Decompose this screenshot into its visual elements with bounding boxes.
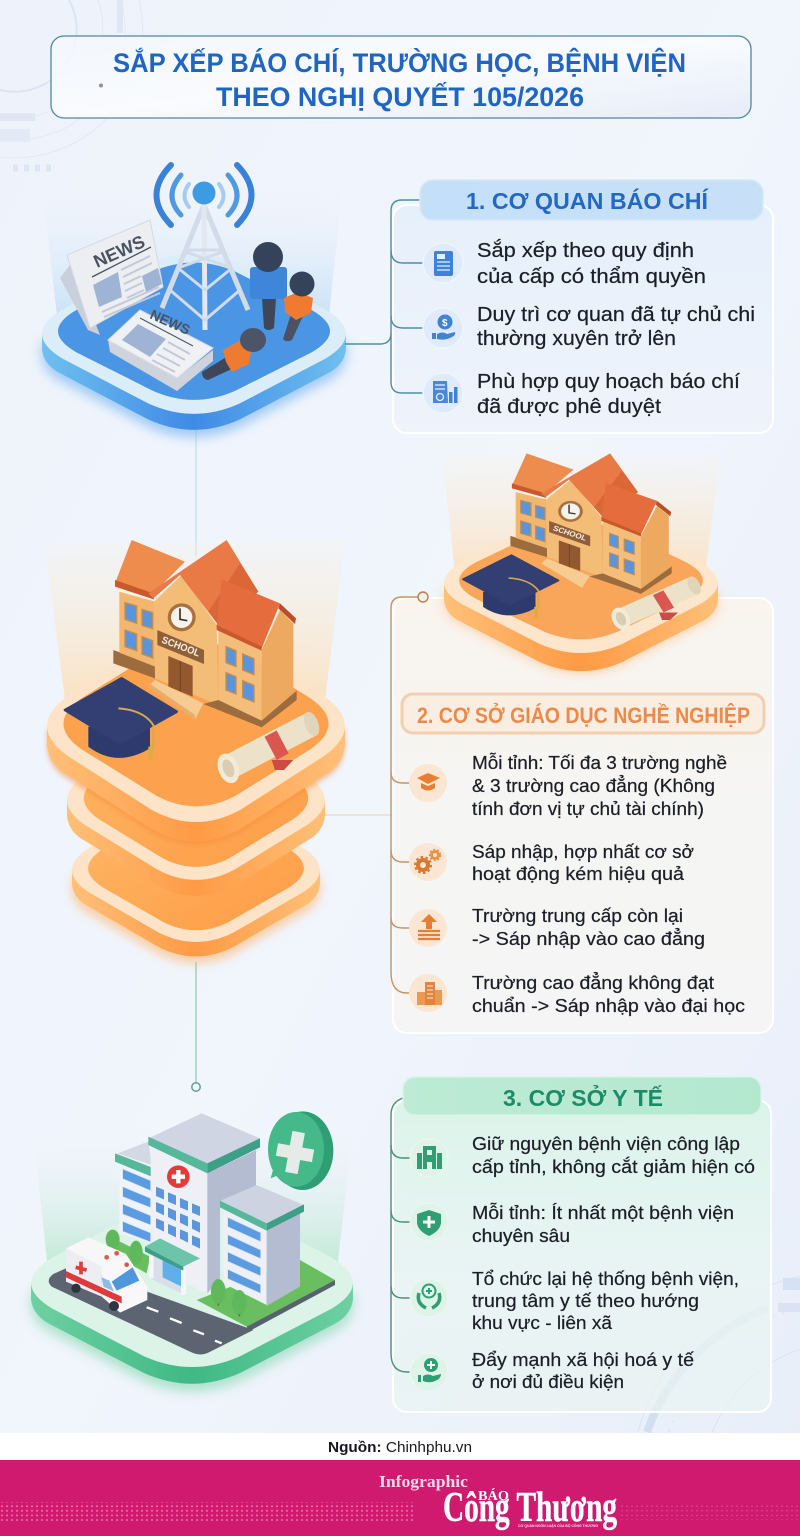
platform layer 2 bbox=[67, 720, 325, 896]
item: merge inefficient bbox=[409, 841, 694, 884]
platform layer 3 bbox=[72, 798, 320, 963]
item: maintain self-funded bbox=[423, 303, 755, 350]
item: provincial limit: Mỗi tỉnh: Tối đa 3 trường nghề bbox=[472, 752, 727, 773]
right block bbox=[223, 1210, 267, 1305]
microphone orange bbox=[283, 272, 314, 341]
connector tree 2 bbox=[391, 592, 428, 993]
road markings bbox=[147, 1307, 222, 1343]
heading 3: 3. CƠ SỞ Y TẾ bbox=[503, 1083, 663, 1111]
small diploma bbox=[608, 575, 704, 632]
item: socialisation bbox=[410, 1349, 695, 1392]
heading 3 bbox=[403, 1077, 761, 1115]
entrance bbox=[150, 1252, 185, 1295]
logo bbox=[379, 1472, 617, 1531]
item: substandard colleges: Trường cao đẳng không đạt bbox=[472, 972, 714, 993]
connector: school to hospital with ring bbox=[192, 962, 200, 1091]
item: press planning: đã được phê duyệt bbox=[477, 395, 661, 418]
platform layer 1 bbox=[47, 630, 345, 845]
panel 3: healthcare bbox=[391, 1077, 771, 1412]
logo: Infographic bbox=[379, 1472, 468, 1491]
heading 1 bbox=[420, 180, 763, 220]
tower signal waves bbox=[156, 165, 252, 225]
item: merge inefficient: Sáp nhập, hợp nhất cơ sở bbox=[472, 841, 694, 862]
item: merge inefficient: hoạt động kém hiệu quả bbox=[472, 863, 685, 884]
panel 1: press agencies bbox=[345, 180, 773, 433]
illustration: school stack bbox=[45, 540, 345, 963]
item: maintain self-funded: Duy trì cơ quan đã tự chủ chi bbox=[477, 303, 755, 326]
item: reorganise system: khu vực - liên xã bbox=[472, 1312, 613, 1333]
newspaper upright bbox=[60, 220, 163, 335]
heading 1: 1. CƠ QUAN BÁO CHÍ bbox=[466, 187, 709, 214]
newspaper upright: NEWS bbox=[90, 231, 148, 272]
small school building bbox=[510, 453, 672, 594]
newspaper flat: NEWS bbox=[148, 306, 193, 338]
left wing bbox=[119, 1160, 152, 1243]
school building bbox=[113, 540, 297, 727]
item: substandard colleges bbox=[409, 972, 745, 1016]
item: provincial limit: tính đơn vị tự chủ tài chính) bbox=[472, 798, 704, 819]
item: substandard colleges: chuẩn -> Sáp nhập vào đại học bbox=[472, 995, 745, 1016]
footer banner bbox=[0, 1460, 800, 1536]
logo: Công Thương bbox=[443, 1485, 617, 1531]
item: arrange per authority: Sắp xếp theo quy định bbox=[477, 239, 694, 262]
item: socialisation: Đẩy mạnh xã hội hoá y tế bbox=[472, 1349, 695, 1370]
source strip bbox=[0, 1433, 800, 1460]
item: arrange per authority bbox=[423, 239, 706, 288]
ambulance bbox=[66, 1237, 147, 1313]
item: intermediate schools: -> Sáp nhập vào cao đẳng bbox=[472, 928, 705, 949]
illustration: hospital bbox=[31, 1111, 353, 1392]
item: reorganise system: trung tâm y tế theo hướng bbox=[472, 1290, 699, 1311]
logo: BÁO bbox=[478, 1487, 509, 1504]
illustration: small school on panel 2 bbox=[443, 453, 720, 674]
logo: CƠ QUAN NGÔN LUẬN CỦA BỘ CÔNG THƯƠNG bbox=[518, 1523, 598, 1528]
item: intermediate schools bbox=[409, 905, 705, 949]
source strip: Nguồn: Chinhphu.vn bbox=[328, 1440, 472, 1456]
decoration: bottom-right tech arcs bbox=[638, 1276, 800, 1432]
small graduation cap bbox=[463, 555, 558, 617]
connector tree 3 bbox=[391, 1098, 410, 1372]
small school building: SCHOOL bbox=[552, 524, 588, 543]
item: keep provincial hospitals bbox=[410, 1133, 755, 1177]
title line 2: THEO NGHỊ QUYẾT 105/2026 bbox=[216, 81, 584, 112]
item: keep provincial hospitals: cấp tỉnh, không cắt giảm hiện có bbox=[472, 1156, 755, 1177]
diploma scroll bbox=[214, 710, 322, 786]
title box bbox=[51, 36, 751, 118]
item: socialisation: ở nơi đủ điều kiện bbox=[472, 1371, 624, 1392]
item: intermediate schools: Trường trung cấp còn lại bbox=[472, 905, 683, 926]
title line 1: SẮP XẾP BÁO CHÍ, TRƯỜNG HỌC, BỆNH VIỆN bbox=[113, 47, 686, 78]
grass bbox=[197, 1260, 335, 1327]
illustration: press platform bbox=[42, 165, 346, 437]
graduation cap bbox=[65, 678, 177, 761]
trees bbox=[106, 1230, 247, 1315]
item: reorganise system: Tổ chức lại hệ thống bệnh viện, bbox=[472, 1268, 739, 1289]
road bbox=[49, 1265, 253, 1354]
item: maintain self-funded: thường xuyên trở lên bbox=[477, 327, 676, 350]
microphone blue bbox=[250, 242, 287, 330]
item: press planning: Phù hợp quy hoạch báo chí bbox=[477, 370, 740, 393]
item: specialised hospital bbox=[410, 1202, 734, 1246]
item: maintain self-funded: $ bbox=[442, 318, 448, 329]
connector tree 1 bbox=[345, 200, 424, 393]
panel 2: vocational education bbox=[391, 592, 773, 1033]
item: arrange per authority: của cấp có thẩm quyền bbox=[477, 265, 706, 288]
microphone lying bbox=[202, 328, 266, 380]
vertical connector: press to school bbox=[195, 430, 197, 556]
school building: SCHOOL bbox=[160, 635, 201, 659]
main block bbox=[151, 1145, 207, 1293]
item: reorganise system bbox=[410, 1268, 739, 1333]
item: provincial limit bbox=[409, 752, 727, 819]
decoration: top-left tech arcs bbox=[0, 0, 143, 168]
medical speech bubble bbox=[268, 1111, 333, 1190]
heading 2: 2. CƠ SỞ GIÁO DỤC NGHỀ NGHIỆP bbox=[417, 703, 750, 728]
horizontal connector: school stack to panel 2 bbox=[325, 814, 392, 816]
broadcast tower bbox=[162, 182, 248, 330]
item: specialised hospital: chuyên sâu bbox=[472, 1225, 570, 1246]
heading 2 bbox=[402, 694, 764, 733]
item: provincial limit: & 3 trường cao đẳng (Không bbox=[472, 775, 715, 796]
item: press planning bbox=[423, 370, 740, 418]
newspaper flat bbox=[108, 306, 213, 391]
item: specialised hospital: Mỗi tỉnh: Ít nhất một bệnh viện bbox=[472, 1202, 734, 1223]
item: keep provincial hospitals: Giữ nguyên bệnh viện công lập bbox=[472, 1133, 740, 1154]
